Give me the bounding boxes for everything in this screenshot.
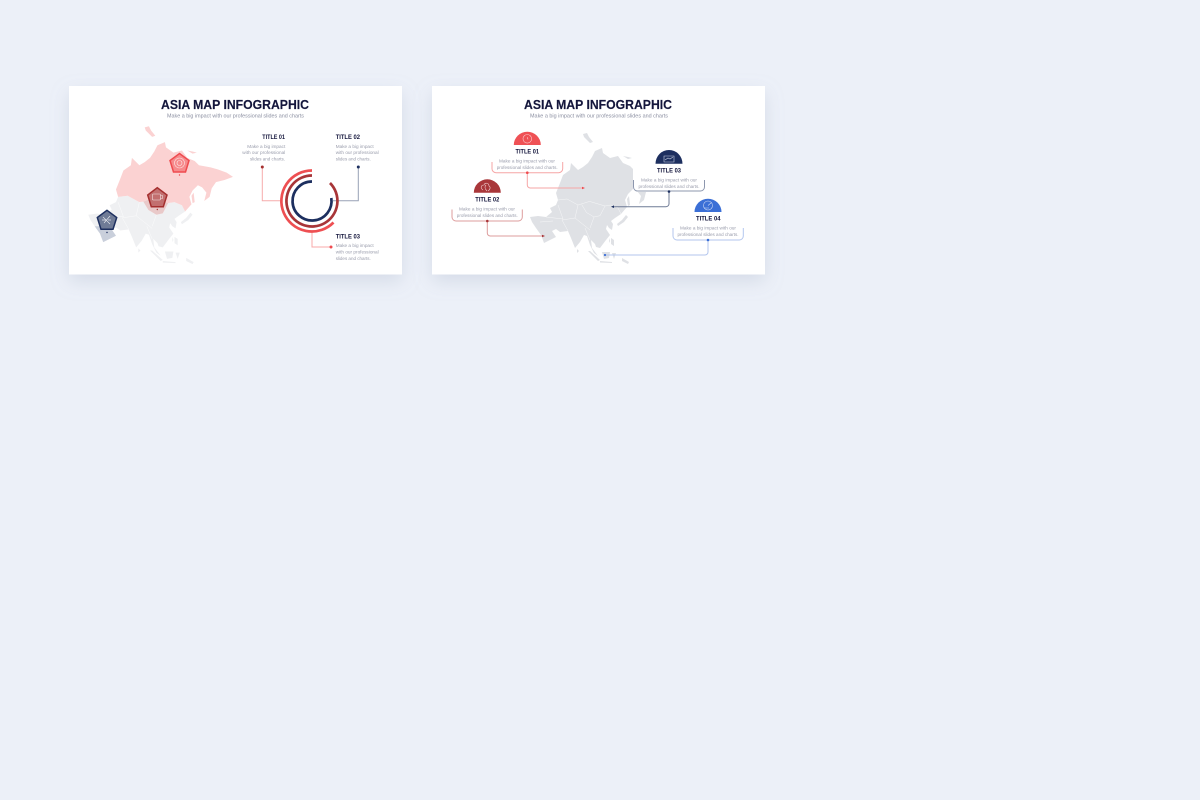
- text: left title 01: slides and charts.: [250, 156, 285, 162]
- connector: title 03: [312, 232, 332, 248]
- callout: title 03: professional slides and charts.: [638, 184, 700, 190]
- text: left title 02: slides and charts.: [336, 156, 371, 162]
- callout: title 02: [452, 179, 522, 222]
- text: left title 02: Make a big impact: [336, 144, 374, 150]
- semicircle badge: title 04: [694, 199, 722, 212]
- panel: left slide: [69, 86, 402, 274]
- map: Mongolia highlight: [143, 198, 168, 215]
- right title: ASIA MAP INFOGRAPHIC: [524, 97, 672, 112]
- callout: title 01: TITLE 01: [516, 149, 539, 156]
- right subtitle: Make a big impact with our professional slides and charts: [530, 114, 668, 120]
- callout: title 02: professional slides and charts.: [457, 213, 518, 219]
- callout: title 04: TITLE 04: [696, 216, 721, 223]
- arrow: title 03: [611, 190, 670, 208]
- panel: right slide: [432, 86, 765, 274]
- arrow: title 01: [527, 173, 585, 189]
- left title: ASIA MAP INFOGRAPHIC: [161, 97, 309, 112]
- callout: title 02: TITLE 02: [475, 197, 500, 204]
- callout: title 04: professional slides and charts.: [678, 232, 738, 238]
- semicircle badge: title 02: [474, 179, 501, 193]
- text: left title 03: Make a big impact: [336, 243, 374, 249]
- concentric arc chart: [281, 170, 337, 231]
- map: Asia: [530, 133, 666, 264]
- semicircle badge: title 01: [514, 132, 541, 145]
- connector: title 01: [261, 166, 281, 201]
- text: left title 01: [242, 134, 286, 162]
- connector: title 02: [333, 166, 360, 201]
- text: left title 01: Make a big impact: [247, 144, 286, 150]
- semicircle badge: title 03: [656, 150, 682, 164]
- callout: title 03: [633, 150, 705, 192]
- callout: title 03: Make a big impact with our: [641, 177, 697, 183]
- callout: title 01: [492, 132, 563, 174]
- callout: title 02: Make a big impact with our: [459, 206, 515, 212]
- text: left title 01: with our professional: [242, 150, 285, 156]
- pentagon marker: red: [170, 154, 189, 176]
- callout: title 04: [673, 199, 743, 241]
- arrow: title 02: [487, 221, 545, 237]
- left subtitle: Make a big impact with our professional slides and charts: [167, 114, 304, 120]
- map: Arabia highlight: [95, 226, 116, 242]
- text: left title 02: TITLE 02: [336, 134, 361, 141]
- text: left title 03: TITLE 03: [336, 234, 361, 241]
- arrow: title 04: [604, 240, 708, 256]
- text: left title 03: slides and charts.: [336, 256, 371, 262]
- map: rest of Asia: [88, 196, 194, 264]
- callout: title 01: professional slides and charts.: [497, 165, 558, 171]
- pentagon marker: navy: [97, 210, 117, 233]
- text: left title 03: [336, 234, 379, 262]
- callout: title 01: Make a big impact with our: [499, 158, 555, 164]
- map: highlighted Asia: [88, 126, 233, 264]
- text: left title 02: [336, 134, 379, 162]
- text: left title 03: with our professional: [336, 249, 379, 255]
- callout: title 04: Make a big impact with our: [680, 225, 736, 231]
- text: left title 02: with our professional: [336, 150, 379, 156]
- text: left title 01: TITLE 01: [262, 134, 285, 141]
- pentagon marker: dark red: [148, 188, 167, 210]
- callout: title 03: TITLE 03: [657, 168, 682, 175]
- map: Russia: [116, 126, 233, 212]
